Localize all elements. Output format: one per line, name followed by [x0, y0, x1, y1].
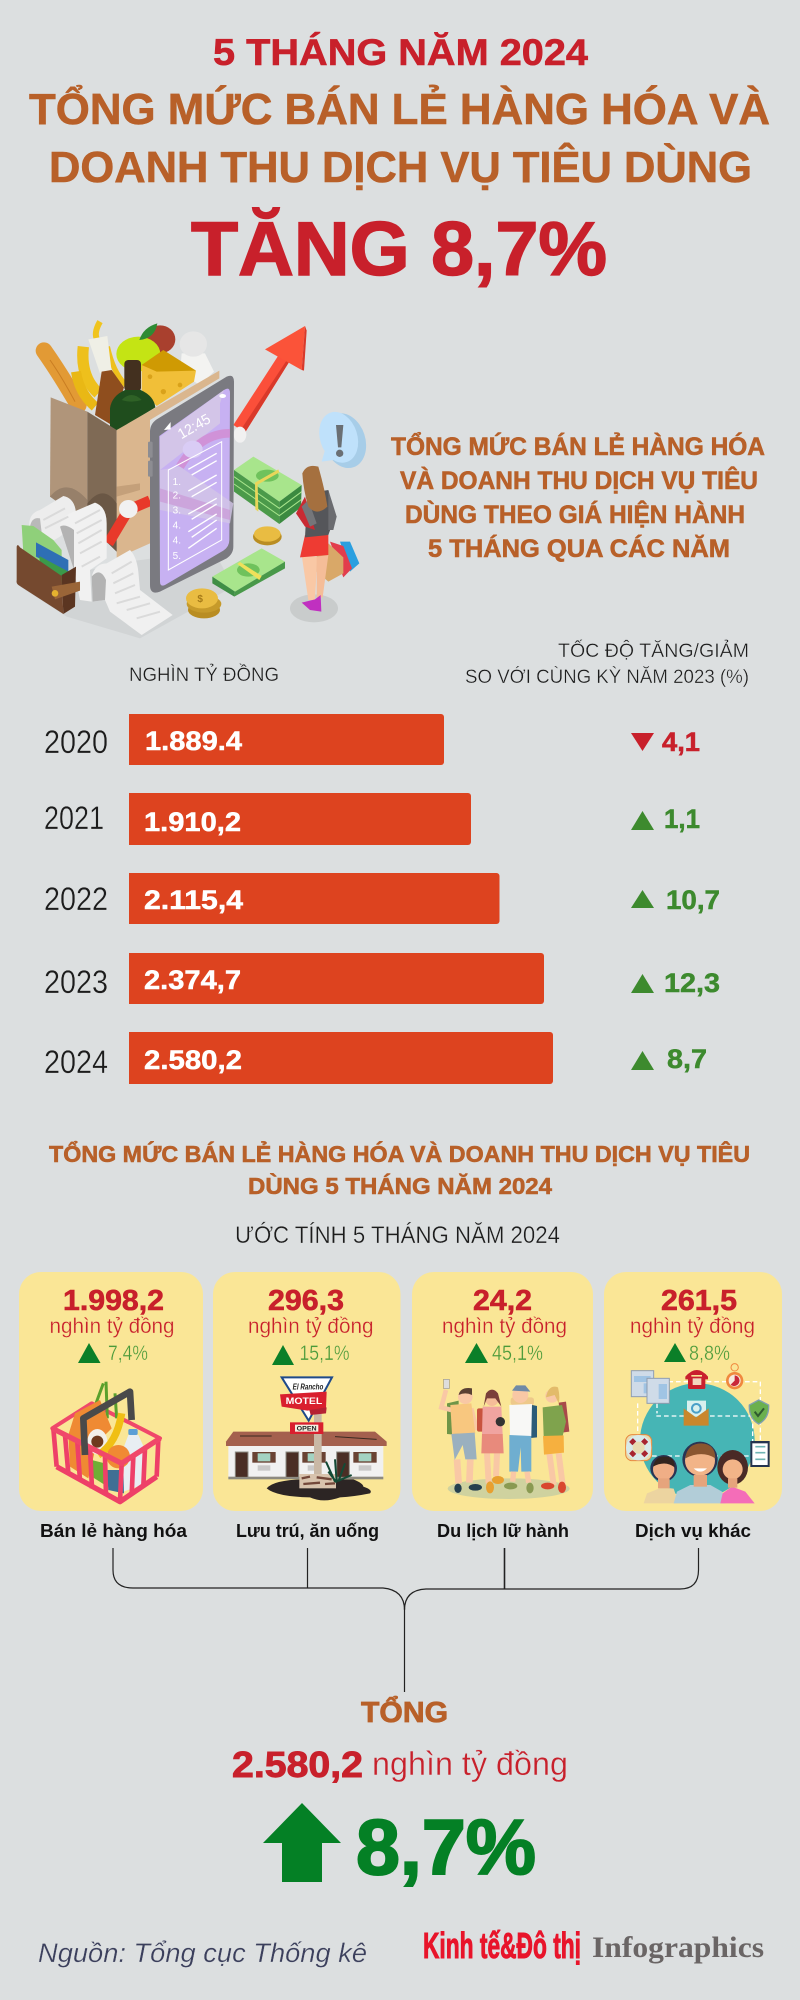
- growth: retail: [78, 1342, 148, 1365]
- logo: [423, 1925, 764, 1966]
- logo infographics: Infographics: [592, 1931, 764, 1964]
- value: retail: 1.998,2: [63, 1285, 164, 1317]
- logo wordmark: Kinh tế&Đô thị: [423, 1925, 581, 1966]
- icon: shopping basket: [52, 1382, 160, 1502]
- icon: group of travellers: [441, 1379, 570, 1499]
- source: Nguồn: Tổng cục Thống kê: [38, 1938, 367, 1968]
- wallet: [17, 525, 80, 614]
- row 2024: 8,7: [667, 1044, 707, 1074]
- phone list numbers: 1.: [173, 477, 181, 488]
- growth: accommodation: [272, 1342, 350, 1365]
- headline figure: tăng 8,7%: TĂNG 8,7%: [191, 207, 607, 292]
- side heading line 1: TỔNG MỨC BÁN LẺ HÀNG HÓA: [391, 431, 765, 461]
- unit: accommodation: nghìn tỷ đồng: [248, 1315, 374, 1338]
- row 2021: 2021: [44, 800, 104, 836]
- panel: travel: [412, 1272, 593, 1511]
- rising red arrow: [108, 326, 307, 543]
- row 2021: [44, 793, 700, 845]
- floor shadow: [20, 550, 233, 638]
- label: other services: Dịch vụ khác: [635, 1521, 751, 1541]
- row 2022: [44, 873, 720, 924]
- total label: TỔNG: [361, 1695, 448, 1729]
- row 2024: 2.580,2: [144, 1045, 242, 1075]
- total amount: 2.580,2: [232, 1744, 363, 1785]
- value: other services: 261,5: [661, 1285, 737, 1317]
- category labels: [40, 1521, 751, 1541]
- panel: other services: [604, 1272, 782, 1511]
- total unit: nghìn tỷ đồng: [372, 1745, 568, 1782]
- side heading line 4: 5 THÁNG QUA CÁC NĂM: [428, 534, 730, 563]
- section heading: [49, 1139, 750, 1199]
- icon: big up arrow: [263, 1803, 341, 1882]
- smartphone with list: [148, 376, 234, 593]
- growth rate label line 1: TỐC ĐỘ TĂNG/GIẢM: [558, 640, 749, 662]
- growth: accommodation: 15,1%: [300, 1342, 350, 1365]
- icon: speech bubble with exclamation: [313, 407, 373, 474]
- row 2022: 2.115,4: [144, 885, 243, 915]
- unit: retail: nghìn tỷ đồng: [50, 1315, 174, 1338]
- title line: tổng mức bán lẻ: TỔNG MỨC BÁN LẺ HÀNG HÓA VÀ: [29, 83, 770, 134]
- row 2022: 10,7: [666, 885, 720, 915]
- subheading: estimate: ƯỚC TÍNH 5 THÁNG NĂM 2024: [235, 1222, 560, 1249]
- row 2023: 2.374,7: [144, 965, 241, 995]
- connector bracket: [113, 1548, 698, 1692]
- smartphone with list: 2.: [173, 490, 181, 501]
- row 2022: 2022: [44, 881, 108, 917]
- value: travel: 24,2: [473, 1285, 532, 1317]
- row 2021: 1.910,2: [144, 807, 241, 837]
- value: accommodation: 296,3: [268, 1285, 344, 1317]
- row 2023: 12,3: [664, 968, 720, 998]
- food in the bag: [44, 322, 214, 431]
- row 2020: 4,1: [662, 727, 700, 757]
- phone clock: 12:45: [175, 411, 214, 443]
- row 2024: [44, 1032, 707, 1084]
- title block: [29, 32, 770, 292]
- growth: other services: 8,8%: [689, 1342, 730, 1365]
- total value: [232, 1744, 568, 1785]
- row 2020: [44, 714, 700, 765]
- row 2023: [44, 953, 720, 1004]
- smartphone with list: 5.: [173, 551, 181, 562]
- icon: customer service team: [626, 1364, 770, 1503]
- title line: 5 tháng năm 2024: 5 THÁNG NĂM 2024: [213, 32, 588, 73]
- motel sign label: MOTEL: [286, 1396, 323, 1406]
- growth: travel: [465, 1342, 543, 1365]
- bar chart: retail sales by year: [44, 714, 720, 1084]
- total growth: 8,7%: [356, 1803, 536, 1891]
- label: retail: Bán lẻ hàng hóa: [40, 1521, 188, 1541]
- icon: motel: [226, 1377, 387, 1500]
- growth: retail: 7,4%: [108, 1342, 148, 1365]
- row 2020: 2020: [44, 724, 108, 760]
- unit label: NGHÌN TỶ ĐỒNG: [129, 664, 279, 686]
- section heading line 2: DÙNG 5 THÁNG NĂM 2024: [248, 1172, 552, 1199]
- coin dollar marks: $: [197, 594, 203, 605]
- row 2021: 1,1: [664, 804, 700, 834]
- row 2024: 2024: [44, 1044, 108, 1080]
- growth rate label line 2: SO VỚI CÙNG KỲ NĂM 2023 (%): [465, 666, 749, 688]
- smartphone with list: 4.: [173, 520, 181, 531]
- unit: travel: nghìn tỷ đồng: [442, 1315, 567, 1338]
- illustration: shopping bag, phone, arrow and shopper: [17, 322, 373, 638]
- smartphone with list: 4.: [173, 535, 181, 546]
- banknote stack: [234, 457, 302, 524]
- unit: other services: nghìn tỷ đồng: [630, 1315, 755, 1338]
- shopper woman with bags: [290, 466, 359, 622]
- paper bag: [50, 371, 219, 558]
- second banknote bundle: [212, 548, 285, 597]
- label: travel: Du lịch lữ hành: [437, 1521, 569, 1541]
- motel open sign: OPEN: [297, 1427, 317, 1433]
- coins: [186, 526, 282, 618]
- side heading line 2: VÀ DOANH THU DỊCH VỤ TIÊU: [400, 465, 758, 495]
- growth: travel: 45,1%: [492, 1342, 543, 1365]
- section heading line 1: TỔNG MỨC BÁN LẺ HÀNG HÓA VÀ DOANH THU DỊCH VỤ TIÊU: [49, 1139, 750, 1167]
- side heading line 3: DÙNG THEO GIÁ HIỆN HÀNH: [405, 499, 745, 529]
- title line: doanh thu: DOANH THU DỊCH VỤ TIÊU DÙNG: [49, 142, 752, 192]
- side heading: [391, 431, 765, 563]
- row 2020: 1.889.4: [145, 726, 242, 756]
- smartphone with list: 3.: [173, 505, 181, 516]
- growth: other services: [664, 1342, 730, 1365]
- panel: accommodation: [213, 1272, 400, 1511]
- receipts: [29, 496, 173, 635]
- label: accommodation: Lưu trú, ăn uống: [236, 1521, 379, 1541]
- motel sign name: El Rancho: [293, 1381, 323, 1391]
- row 2023: 2023: [44, 964, 108, 1000]
- panel: retail: [19, 1272, 203, 1511]
- chart column headers: [129, 640, 749, 688]
